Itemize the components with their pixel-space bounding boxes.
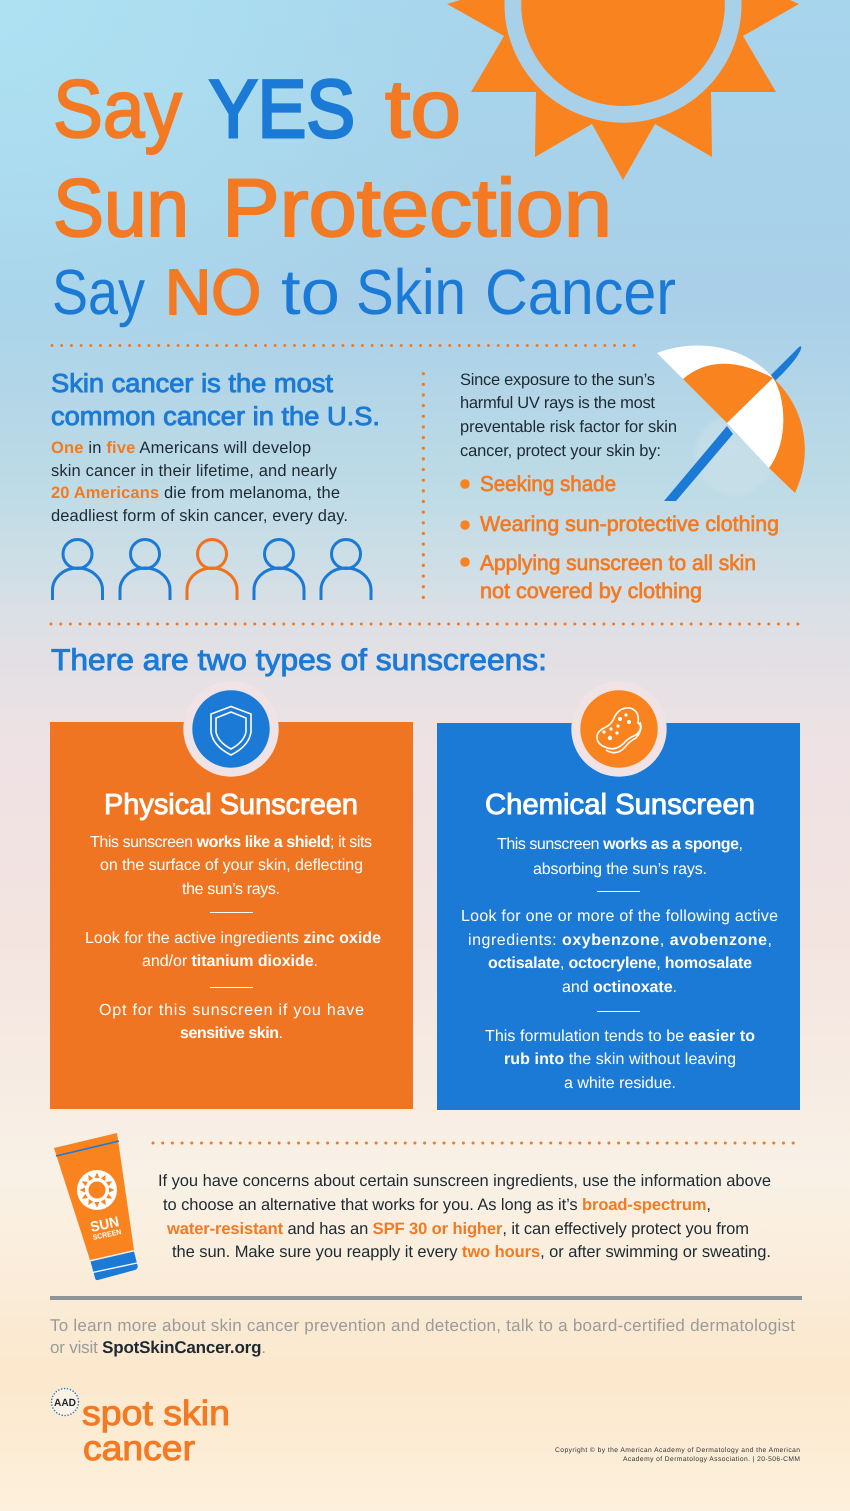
- copyright: Academy of Dermatology Association. | 20-506-CMM: [623, 1456, 800, 1463]
- text block: protect your skin intro: harmful UV rays is the most: [460, 394, 655, 412]
- panel: chemical sunscreen: This formulation tends to be easier to: [485, 1028, 755, 1045]
- list: sun protection steps: [460, 472, 779, 603]
- list: sun protection steps: Wearing sun-protective clothing: [480, 512, 779, 536]
- text block: statistic details: One in five Americans will develop: [51, 439, 311, 457]
- icon: sunscreen tube: SCREEN: [92, 1227, 122, 1242]
- panel: physical sunscreen: Physical Sunscreen: [104, 789, 358, 821]
- text block: statistic details: 20 Americans die from melanoma, the: [51, 484, 340, 502]
- title: Protection: [222, 163, 612, 254]
- text block: learn more: To learn more about skin cancer prevention and detection, talk to a board-certified dermatologist: [50, 1316, 795, 1335]
- list: sun protection steps: Applying sunscreen to all skin: [480, 551, 756, 575]
- logo: spot skin cancer: AAD: [54, 1397, 76, 1409]
- panel: physical sunscreen: Look for the active ingredients zinc oxide: [85, 930, 381, 947]
- panel: physical sunscreen: This sunscreen works like a shield; it sits: [90, 834, 372, 851]
- list: sun protection steps: not covered by clothing: [480, 579, 702, 603]
- panel: chemical sunscreen: a white residue.: [564, 1075, 676, 1092]
- title: Sun: [53, 163, 189, 254]
- title: YES: [209, 64, 355, 155]
- heading: skin cancer statistic: Skin cancer is the most: [51, 368, 334, 398]
- icon: sun: [447, 0, 799, 180]
- panel: physical sunscreen: sensitive skin.: [180, 1025, 283, 1042]
- text block: learn more: or visit SpotSkinCancer.org.: [50, 1338, 266, 1357]
- title: Say: [53, 64, 182, 155]
- title: [52, 64, 676, 328]
- panel: chemical sunscreen: rub into the skin without leaving: [504, 1051, 736, 1068]
- panel: chemical sunscreen: This sunscreen works as a sponge,: [497, 836, 743, 853]
- icon: umbrella: [657, 345, 805, 501]
- text block: protect your skin intro: [460, 371, 677, 460]
- panel: physical sunscreen: [50, 681, 413, 1109]
- title: Skin: [356, 256, 466, 328]
- title: Say: [52, 256, 145, 328]
- icon: sunscreen tube: SUN: [89, 1214, 121, 1236]
- panel: physical sunscreen: the sun’s rays.: [182, 881, 280, 898]
- icon: sponge: [580, 690, 658, 768]
- text block: statistic details: deadliest form of skin cancer, every day.: [51, 507, 348, 525]
- text block: ingredient concerns: to choose an alternative that works for you. As long as it’s broad-spectrum,: [163, 1196, 711, 1214]
- text block: ingredient concerns: [158, 1172, 771, 1261]
- list: sun protection steps: Seeking shade: [480, 472, 616, 496]
- icon: sunscreen tube: [54, 1133, 138, 1280]
- panel: physical sunscreen: Opt for this sunscreen if you have: [99, 1002, 364, 1019]
- copyright: Copyright © by the American Academy of Dermatology and the American: [555, 1447, 800, 1454]
- icon: row of five people: [52, 540, 371, 600]
- text block: protect your skin intro: preventable risk factor for skin: [460, 418, 677, 436]
- heading: skin cancer statistic: common cancer in the U.S.: [51, 401, 380, 431]
- panel: chemical sunscreen: ingredients: oxybenzone, avobenzone,: [468, 932, 772, 949]
- copyright: [555, 1447, 800, 1463]
- panel: chemical sunscreen: octisalate, octocrylene, homosalate: [488, 955, 752, 972]
- title: to: [281, 256, 340, 328]
- text block: protect your skin intro: cancer, protect your skin by:: [460, 442, 661, 460]
- title: to: [385, 64, 461, 155]
- logo: spot skin cancer: spot skin: [82, 1394, 230, 1433]
- text block: statistic details: [51, 439, 348, 525]
- panel: chemical sunscreen: absorbing the sun’s rays.: [533, 861, 707, 878]
- panel: chemical sunscreen: Look for one or more of the following active: [461, 908, 778, 925]
- text block: ingredient concerns: If you have concerns about certain sunscreen ingredients, use the information above: [158, 1172, 771, 1190]
- heading: two types of sunscreens: There are two types of sunscreens:: [51, 644, 547, 677]
- text block: ingredient concerns: water-resistant and has an SPF 30 or higher, it can effectively protect you from: [166, 1220, 749, 1238]
- panel: chemical sunscreen: [437, 681, 800, 1110]
- title: Cancer: [485, 256, 676, 328]
- text block: learn more: [50, 1316, 795, 1357]
- panel: chemical sunscreen: and octinoxate.: [562, 979, 677, 996]
- title: NO: [165, 256, 261, 328]
- logo: spot skin cancer: [52, 1388, 230, 1468]
- text block: ingredient concerns: the sun. Make sure you reapply it every two hours, or after swimming or sweating.: [172, 1243, 771, 1261]
- logo: spot skin cancer: cancer: [83, 1429, 195, 1468]
- text block: protect your skin intro: Since exposure to the sun’s: [460, 371, 655, 389]
- icon: shield: [192, 690, 270, 768]
- text block: statistic details: skin cancer in their lifetime, and nearly: [51, 462, 338, 480]
- panel: physical sunscreen: on the surface of your skin, deflecting: [100, 857, 363, 874]
- heading: skin cancer statistic: [51, 368, 380, 431]
- panel: physical sunscreen: and/or titanium dioxide.: [142, 953, 318, 970]
- panel: chemical sunscreen: Chemical Sunscreen: [485, 789, 755, 821]
